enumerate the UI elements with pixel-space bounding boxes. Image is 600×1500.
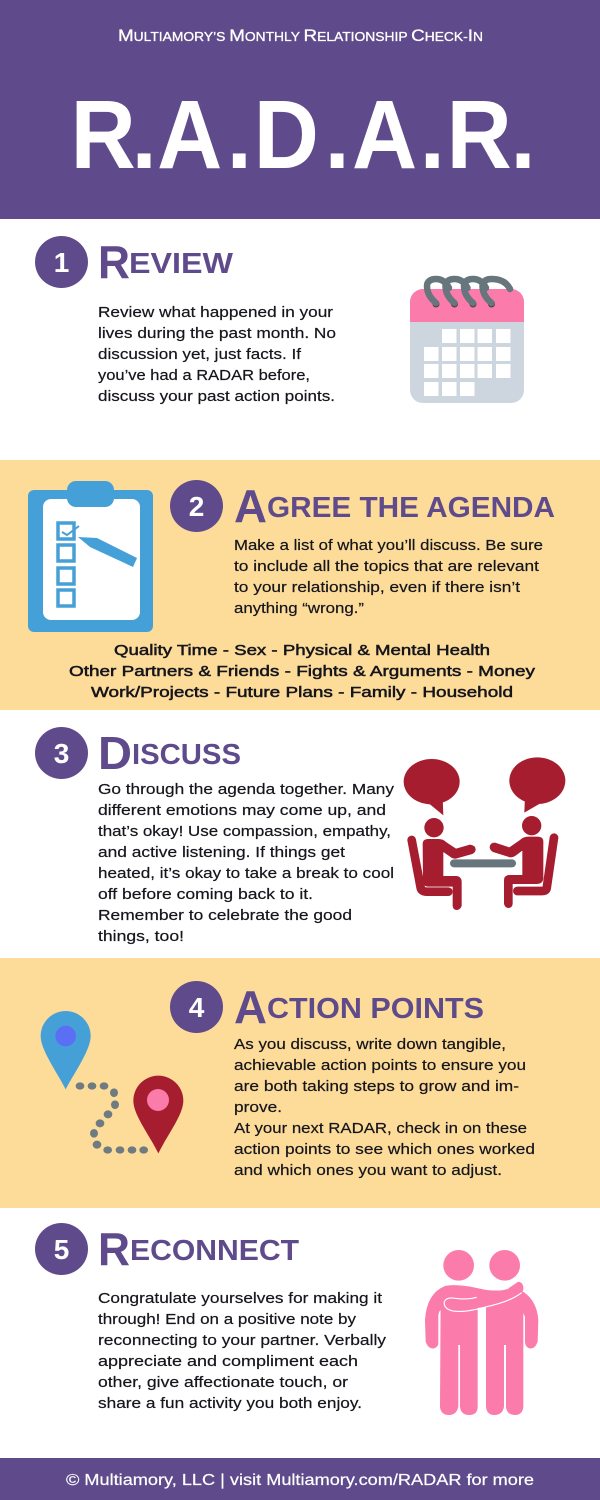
icon: clipboard — [28, 481, 153, 632]
text block: discuss: different emotions may come up, and — [98, 802, 386, 819]
text block: action points: achievable action points to ensure you — [234, 1057, 526, 1074]
number badge 1 — [35, 236, 88, 288]
number badge 5: 5 — [54, 1234, 69, 1265]
icon: calendar — [410, 279, 524, 403]
number badge 3: 3 — [54, 738, 69, 769]
text block: discuss: things, too! — [98, 928, 184, 945]
text block: review: lives during the past month. No — [98, 325, 336, 342]
text block: action points: prove. — [234, 1099, 282, 1116]
topics list: Work/Projects - Future Plans - Family - Household — [91, 684, 513, 701]
heading: review: EVIEW — [129, 248, 234, 280]
heading: action points: A — [234, 981, 267, 1033]
number badge 4 — [170, 981, 223, 1033]
heading: reconnect: R — [98, 1223, 130, 1275]
title: R.A.D.A.R. — [71, 80, 536, 189]
panel: step 1 review — [0, 219, 600, 460]
text block: reconnect: Congratulate yourselves for making it — [98, 1290, 383, 1307]
text block: discuss: heated, it’s okay to take a break to cool — [98, 865, 394, 882]
text block: discuss: Remember to celebrate the good — [98, 907, 352, 924]
text block: agenda: Make a list of what you’ll discuss. Be sure — [234, 537, 543, 554]
text block: discuss: that’s okay! Use compassion, empathy, — [98, 823, 391, 840]
text block: reconnect: other, give affectionate touch, or — [98, 1374, 348, 1391]
heading: discuss — [98, 727, 241, 779]
subtitle: MULTIAMORY’S MONTHLY RELATIONSHIP CHECK-IN — [118, 26, 483, 45]
text block: review: discuss your past action points. — [98, 388, 335, 405]
topics list: Quality Time - Sex - Physical & Mental Health — [114, 642, 490, 659]
number badge 1: 1 — [54, 247, 69, 278]
text block: action points: action points to see which ones worked — [234, 1141, 535, 1158]
heading: discuss: ISCUSS — [132, 739, 241, 771]
text block: agenda — [234, 537, 543, 617]
icon: two people embracing — [425, 1250, 538, 1415]
text block: action points: and which ones you want to adjust. — [234, 1162, 502, 1179]
footer: © Multiamory, LLC | visit Multiamory.com/RADAR for more — [66, 1472, 534, 1489]
text block: action points: As you discuss, write down tangible, — [234, 1036, 506, 1053]
heading: agree the agenda: A — [234, 480, 267, 532]
heading: agree the agenda: GREE THE AGENDA — [267, 492, 555, 524]
text block: reconnect: through! End on a positive note by — [98, 1311, 357, 1328]
panel: step 3 discuss — [0, 710, 600, 958]
heading: discuss: D — [98, 727, 132, 779]
text block: discuss: and active listening. If things get — [98, 844, 346, 861]
text block: review: Review what happened in your — [98, 304, 333, 321]
icon: two people talking at a table — [404, 757, 565, 910]
panel: step 5 reconnect — [0, 1208, 600, 1458]
heading: action points: CTION POINTS — [267, 993, 484, 1025]
number badge 2 — [170, 480, 223, 532]
text block: reconnect: share a fun activity you both enjoy. — [98, 1395, 362, 1412]
number badge 3 — [35, 727, 88, 779]
icon: map pins with dotted route — [41, 1011, 183, 1154]
heading: agree the agenda — [234, 480, 555, 532]
text block: action points: At your next RADAR, check in on these — [234, 1120, 527, 1137]
text block: discuss: Go through the agenda together. Many — [98, 781, 395, 798]
text block: reconnect: reconnecting to your partner. Verbally — [98, 1332, 387, 1349]
panel: step 2 agree the agenda — [0, 460, 600, 710]
number badge 2: 2 — [189, 491, 204, 522]
text block: review — [98, 304, 336, 405]
number badge 5 — [35, 1223, 88, 1275]
text block: action points: are both taking steps to grow and im- — [234, 1078, 519, 1095]
text block: agenda: to include all the topics that are relevant — [234, 558, 540, 575]
topics list — [69, 642, 536, 701]
text block: action points — [234, 1036, 535, 1179]
heading: reconnect: ECONNECT — [130, 1235, 299, 1267]
heading: review: R — [98, 236, 130, 288]
topics list: Other Partners & Friends - Fights & Arguments - Money — [69, 663, 536, 680]
text block: review: discussion yet, just facts. If — [98, 346, 302, 363]
text block: discuss — [98, 781, 395, 945]
panel: step 4 action points — [0, 958, 600, 1208]
text block: reconnect — [98, 1290, 387, 1412]
text block: review: you’ve had a RADAR before, — [98, 367, 310, 384]
text block: agenda: to your relationship, even if there isn’t — [234, 579, 521, 596]
footer — [0, 1458, 600, 1500]
heading: review — [98, 236, 234, 288]
text block: discuss: off before coming back to it. — [98, 886, 313, 903]
heading: reconnect — [98, 1223, 299, 1275]
text block: reconnect: appreciate and compliment each — [98, 1353, 358, 1370]
number badge 4: 4 — [189, 992, 205, 1023]
heading: action points — [234, 981, 484, 1033]
text block: agenda: anything “wrong.” — [234, 600, 364, 617]
panel: header — [0, 0, 600, 219]
